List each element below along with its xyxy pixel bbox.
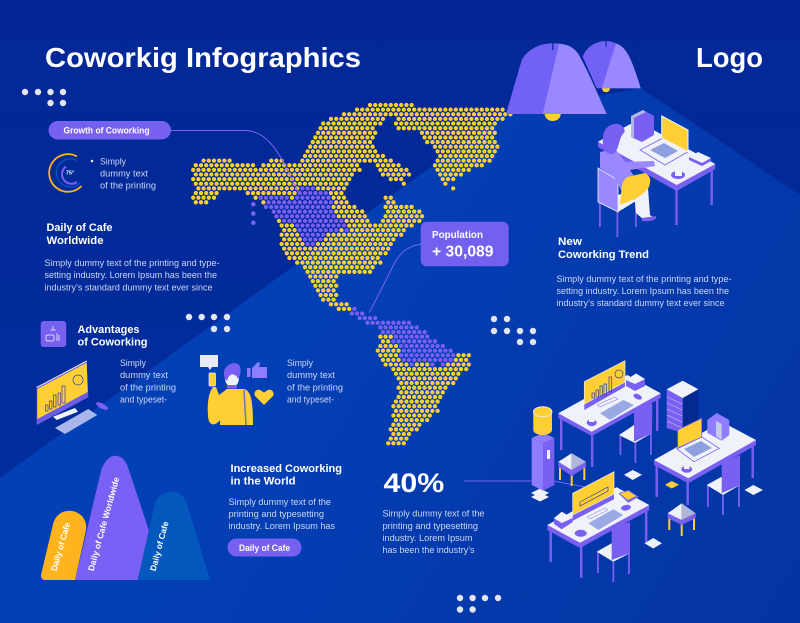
dots: bottom <box>457 595 501 613</box>
mountain chart <box>41 456 210 580</box>
paragraph: 40 percent: Simply dummy text of the <box>382 508 484 518</box>
text: advantages left column: dummy text <box>120 370 169 380</box>
office: desk two <box>654 413 756 505</box>
paragraph: increased coworking: Simply dummy text of the <box>228 497 331 507</box>
illustration: monitor and keyboard <box>37 361 109 434</box>
paragraph: 40 percent: printing and typesetting <box>382 521 478 531</box>
callout: population: + 30,089 <box>432 244 494 260</box>
office: desk one <box>558 361 661 467</box>
chart: purple peak <box>75 456 149 580</box>
chart label: daily of cafe yellow: Daily of Cafe <box>49 521 72 572</box>
title: Coworkig Infographics <box>45 42 361 73</box>
chart label: worldwide purple: Daily of Cafe Worldwide <box>86 476 121 572</box>
callout: population <box>421 222 509 266</box>
bullet text: simply dummy text: Simply <box>100 156 126 166</box>
pill: daily of cafe <box>228 538 302 556</box>
text: advantages left column <box>120 358 176 404</box>
paragraph: daily of cafe: setting industry. Lorem Ipsum has been the <box>44 270 217 280</box>
dotted map of the Americas <box>193 105 510 443</box>
text: advantages right column <box>287 358 343 404</box>
office: scattered papers <box>624 470 763 548</box>
paragraph: increased coworking: printing and typesetting <box>228 509 324 519</box>
paragraph: increased coworking <box>228 497 335 531</box>
illustration: woman at desk <box>598 110 715 237</box>
heading: advantages of coworking <box>78 324 148 348</box>
paragraph: 40 percent <box>382 508 484 555</box>
connector: population to map <box>369 244 421 313</box>
paragraph: daily of cafe <box>44 258 220 292</box>
paragraph: coworking trend: Simply dummy text of the printing and type- <box>556 274 732 284</box>
office: desk three <box>547 472 649 578</box>
heading: new coworking trend: Coworking Trend <box>558 249 649 261</box>
icon: advantages <box>41 321 66 347</box>
heading: daily of cafe worldwide: Daily of Cafe <box>46 222 112 234</box>
text: advantages right column: of the printing <box>287 382 343 392</box>
chart label: daily of cafe blue: Daily of Cafe <box>148 520 171 572</box>
paragraph: daily of cafe: Simply dummy text of the printing and type- <box>44 258 220 268</box>
map: yellow land dots <box>193 105 510 443</box>
office: chair three <box>597 522 630 582</box>
logo: Logo <box>696 42 763 73</box>
office: stool two <box>668 503 696 536</box>
map: three loose dots <box>251 202 256 225</box>
chart: yellow peak <box>41 511 86 580</box>
bullet text: simply dummy text: of the printing <box>100 180 156 190</box>
pill: growth of coworking: Growth of Coworking <box>64 125 150 135</box>
bullet text: simply dummy text: dummy text <box>100 168 149 178</box>
bullet text: simply dummy text <box>91 156 156 190</box>
heading: daily of cafe worldwide <box>46 222 112 247</box>
heading: new coworking trend <box>558 236 649 261</box>
map: purple highlighted dots <box>261 188 453 365</box>
paragraph: daily of cafe: industry’s standard dummy text ever since <box>44 282 212 292</box>
stat: 40 percent: 40% <box>384 468 444 498</box>
text: advantages right column: Simply <box>287 358 313 368</box>
paragraph: coworking trend: setting industry. Lorem Ipsum has been the <box>556 286 729 296</box>
heading: increased coworking: in the World <box>230 476 296 488</box>
text: advantages left column: Simply <box>120 358 146 368</box>
dots: top left <box>22 89 66 106</box>
pill: growth of coworking <box>48 121 171 140</box>
office: chair one <box>619 403 652 463</box>
heading: advantages of coworking: Advantages <box>78 324 140 336</box>
office: chair two <box>707 455 740 515</box>
text: advantages right column: and typeset- <box>287 394 334 404</box>
office: water cooler <box>531 407 554 502</box>
connector: 40 percent to office <box>464 481 590 488</box>
dots: centre right <box>491 316 536 345</box>
heading: increased coworking: Increased Coworking <box>230 463 342 475</box>
heading: daily of cafe worldwide: Worldwide <box>46 235 104 247</box>
office: stool one <box>558 453 586 486</box>
paragraph: coworking trend: industry’s standard dummy text ever since <box>556 298 724 308</box>
paragraph: 40 percent: has been the industry’s <box>382 545 475 555</box>
heading: increased coworking <box>230 463 342 488</box>
gauge 75 percent <box>49 154 82 192</box>
lamp: large <box>506 43 607 121</box>
gauge 75 percent: 75° <box>66 171 74 177</box>
paragraph: increased coworking: industry. Lorem Ipsum has <box>228 521 335 531</box>
pill: daily of cafe: Daily of Cafe <box>239 543 290 553</box>
text: advantages left column: and typeset- <box>120 394 167 404</box>
heading: new coworking trend: New <box>558 236 582 248</box>
callout: population: Population <box>432 229 483 241</box>
paragraph: coworking trend <box>556 274 732 308</box>
connector: growth pill to map <box>171 130 298 192</box>
heading: advantages of coworking: of Coworking <box>78 336 148 348</box>
dots: centre left <box>186 314 230 332</box>
illustration: office <box>531 361 763 582</box>
text: advantages left column: of the printing <box>120 382 176 392</box>
chart: blue peak <box>138 492 210 580</box>
paragraph: 40 percent: industry. Lorem Ipsum <box>382 533 472 543</box>
lamp: small <box>583 41 641 92</box>
illustration: person with phone, like and heart <box>200 355 274 425</box>
office: filing cabinet <box>667 381 698 433</box>
text: advantages right column: dummy text <box>287 370 336 380</box>
